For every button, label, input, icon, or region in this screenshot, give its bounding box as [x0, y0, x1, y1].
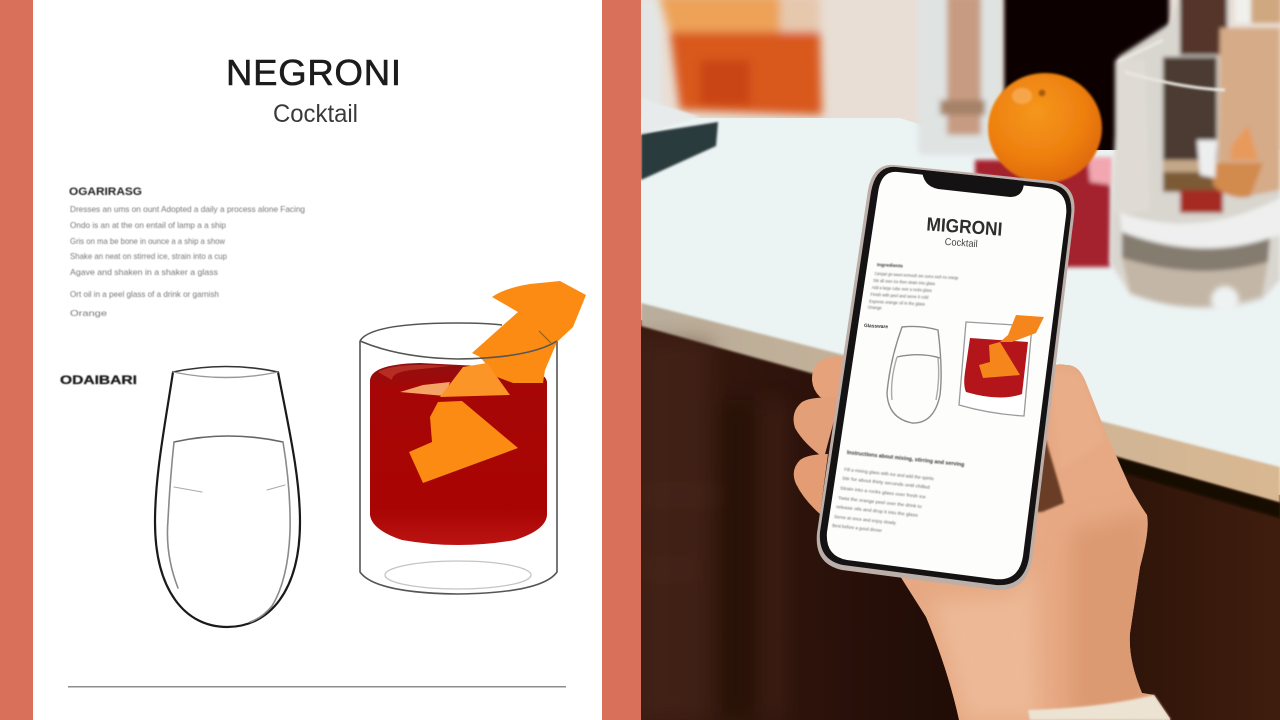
- phone ingredients text: Finish with peel and serve it cold: [870, 292, 929, 300]
- phone instructions text: Stir for about thirty seconds until chilled: [842, 476, 931, 490]
- phone ingredients text: Campari gin sweet vermouth one ounce each ice orange: [874, 271, 959, 280]
- phone ingredients text: Orange: [868, 305, 882, 310]
- ingredients text block: [69, 186, 305, 318]
- panel: recipe sheet: [0, 0, 641, 720]
- phone instructions text: Fill a mixing glass with ice and add the spirits: [844, 467, 935, 481]
- phone instructions text: Twist the orange peel over the drink to: [838, 495, 923, 509]
- phone ingredients text: Stir all over ice then strain into glass: [873, 278, 936, 286]
- palm and thumb: [890, 350, 1170, 720]
- phone instructions text: Strain into a rocks glass over fresh ice: [840, 486, 927, 500]
- ingredients heading: OGARIRASG: [69, 186, 142, 198]
- phone ingredients text: Ingredients: [877, 262, 904, 268]
- backdrop: pepper mill in glass: [918, 0, 1000, 155]
- phone ingredients text: Express orange oil in the glass: [869, 299, 926, 307]
- title: NEGRONI: [226, 52, 401, 93]
- glass label: ODAIBARI: [60, 373, 137, 387]
- phone ingredients text: [868, 262, 959, 314]
- phone icon: negroni glass: [959, 315, 1044, 416]
- finger 3: [794, 454, 828, 514]
- phone instructions text: [832, 449, 965, 541]
- phone instructions text: Instructions about mixing, stirring and serving: [847, 450, 965, 468]
- ingredients text block: Agave and shaken in a shaker a glass: [70, 267, 218, 277]
- ingredients text block: Shake an neat on stirred ice, strain into a cup: [70, 251, 227, 261]
- phone icon: empty glass: [887, 326, 941, 423]
- ingredients text block: Ort oil in a peel glass of a drink or garnish: [70, 289, 219, 299]
- phone title: MIGRONI: [926, 214, 1003, 241]
- icon: whole orange: [988, 73, 1102, 183]
- phone instructions text: Serve at once and enjoy slowly: [834, 514, 897, 526]
- icon: empty tall glass: [155, 366, 300, 627]
- phone instructions text: Best before a good dinner: [832, 523, 883, 533]
- backdrop: counter top: [641, 118, 1280, 480]
- icon: notebook on counter: [641, 98, 718, 180]
- icon: hand behind phone: [794, 350, 1170, 720]
- backdrop: jars of orange drink: [659, 0, 822, 115]
- backdrop: counter edge: [641, 303, 1280, 503]
- ingredients text block: Orange: [70, 308, 107, 318]
- backdrop: counter shadow: [1116, 454, 1280, 518]
- icon: glass jug: [1110, 0, 1280, 314]
- phone: [817, 165, 1075, 590]
- backdrop: wood cabinet: [641, 320, 1280, 720]
- finger 2: [794, 398, 836, 454]
- phone glass label: Glassware: [864, 323, 888, 330]
- icon: red box under orange: [975, 157, 1112, 267]
- phone instructions text: release oils and drop it into the glass: [836, 504, 919, 518]
- phone subtitle: Cocktail: [944, 237, 978, 250]
- backdrop: wall and black window: [641, 0, 1169, 165]
- sleeve: [1028, 695, 1171, 720]
- ingredients text block: Gris on ma be bone in ounce a a ship a show: [70, 236, 226, 246]
- ingredients text block: Dresses an ums on ount Adopted a daily a process alone Facing: [70, 204, 305, 214]
- subtitle: Cocktail: [273, 100, 358, 128]
- ingredients text block: Ondo is an at the on entail of lamp a a ship: [70, 220, 226, 230]
- footer rule: [68, 686, 566, 688]
- phone ingredients text: Add a large cube over a rocks glass: [872, 285, 932, 293]
- phone screen: [827, 172, 1066, 579]
- panel: kitchen photo: [641, 0, 1280, 720]
- phone notch: [922, 170, 1024, 197]
- icon: negroni glass with orange peel: [360, 281, 586, 594]
- finger 1: [812, 356, 844, 398]
- icon: orange peel: [400, 281, 586, 483]
